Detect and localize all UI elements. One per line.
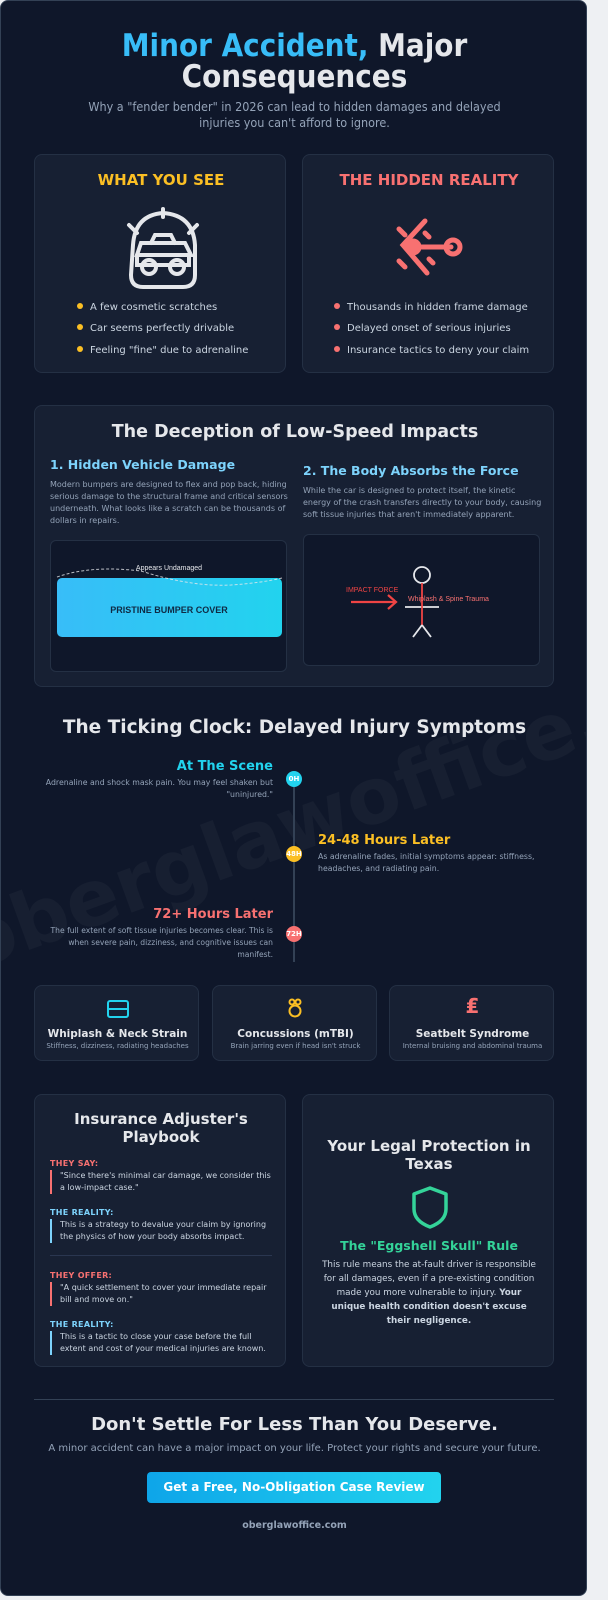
text: eggshell: This rule means the at-fault driver is responsible for all damages, even if a pre-existing condition made you more vulnerable to injury. Your unique health condition doesn't excuse their negligence. (322, 1260, 536, 1326)
title: Minor Accident, Major (122, 28, 467, 64)
dot: 72H (286, 926, 302, 942)
item: 24-48 hours: As adrenaline fades, initial symptoms appear: stiffness, headaches, and radiating pain. (318, 852, 535, 873)
card: whiplash: Stiffness, dizziness, radiating headaches (46, 1042, 189, 1050)
item: reality 2: This is a tactic to close your case before the full extent and cost of your medical injuries are known. (60, 1332, 266, 1353)
panel: what you see (34, 154, 286, 373)
block: body absorbs force: While the car is designed to protect itself, the kinetic energy of the crash transfers directly to your body, causing soft tissue injuries that aren't immediately apparent. (303, 486, 541, 519)
card: whiplash (34, 985, 199, 1061)
icon: seatbelt: ₤ (466, 994, 479, 1018)
heading: ticking clock: The Ticking Clock: Delayed Injury Symptoms (63, 717, 526, 738)
dot: 0H (286, 771, 302, 787)
panel: what you see: Car seems perfectly drivable (90, 323, 234, 334)
icon: car (126, 207, 200, 289)
item: reality 2 (50, 1320, 266, 1355)
card: seatbelt: Internal bruising and abdominal trauma (403, 1042, 542, 1050)
item: 72+ hours: 72+ Hours Later (153, 907, 273, 922)
dot: 72H: 72H (286, 930, 302, 938)
item: they say: "Since there's minimal car damage, we consider this a low-impact case." (60, 1171, 271, 1192)
heading: deception: The Deception of Low-Speed Impacts (112, 422, 478, 442)
block: hidden vehicle damage: 1. Hidden Vehicle Damage (50, 457, 235, 472)
item: at the scene: Adrenaline and shock mask pain. You may feel shaken but "uninjured." (46, 778, 273, 799)
item: reality 1: This is a strategy to devalue your claim by ignoring the physics of how your body absorbs impact. (60, 1220, 266, 1241)
item: they say: THEY SAY: (50, 1159, 98, 1168)
heading: legal protection: Texas (405, 1155, 453, 1173)
button: Get a Free, No-Obligation Case Review (163, 1480, 425, 1494)
item: 72+ hours (50, 907, 273, 959)
panel: legal protection (302, 1094, 554, 1367)
icon: shield (412, 1186, 448, 1229)
heading: legal protection (327, 1137, 531, 1173)
heading: legal protection: Your Legal Protection in (327, 1137, 531, 1155)
subheading: eggshell: The "Eggshell Skull" Rule (340, 1238, 518, 1253)
panel: what you see: Feeling "fine" due to adrenaline (90, 345, 248, 356)
item: they offer: THEY OFFER: (50, 1271, 112, 1280)
diagram: bumper: PRISTINE BUMPER COVER (110, 605, 228, 615)
cta heading: Don't Settle For Less Than You Deserve. (91, 1414, 498, 1435)
item: at the scene: At The Scene (177, 759, 273, 774)
item: reality 1 (50, 1208, 266, 1243)
timeline (46, 759, 535, 962)
cta text: A minor accident can have a major impact on your life. Protect your rights and secure your future. (48, 1443, 541, 1454)
card: concussions (212, 985, 377, 1061)
item: at the scene (46, 759, 273, 799)
item: they offer: "A quick settlement to cover your immediate repair bill and move on." (60, 1283, 267, 1304)
item: 24-48 hours: 24-48 Hours Later (318, 833, 450, 848)
card: concussions: Concussions (mTBI) (237, 1028, 354, 1040)
item: they say (50, 1159, 271, 1194)
item: they offer (50, 1271, 267, 1306)
item: reality 2: THE REALITY: (50, 1320, 114, 1329)
dot: 48H: 48H (286, 850, 302, 858)
card: whiplash: Whiplash & Neck Strain (48, 1028, 187, 1040)
diagram: stick figure (303, 534, 540, 666)
heading: playbook (74, 1110, 248, 1146)
heading: playbook: Insurance Adjuster's (74, 1110, 248, 1128)
card: concussions: Brain jarring even if head isn't struck (231, 1042, 360, 1050)
list: hidden reality (334, 302, 529, 356)
block: hidden vehicle damage: Modern bumpers are designed to flex and pop back, hiding serious damage to the structural frame and critical sensors underneath. What looks like a scratch can be thousands of dollars in repairs. (50, 480, 288, 525)
block: body absorbs force (303, 463, 541, 519)
dot: 48H (286, 846, 302, 862)
item: 24-48 hours (318, 833, 535, 873)
item: reality 1: THE REALITY: (50, 1208, 114, 1217)
panel: insurance playbook (34, 1094, 286, 1367)
card: seatbelt (389, 985, 554, 1061)
block: body absorbs force: 2. The Body Absorbs the Force (303, 463, 519, 478)
heading: hidden reality: THE HIDDEN REALITY (340, 171, 518, 189)
title (122, 28, 468, 95)
panel: hidden reality: Delayed onset of serious injuries (347, 323, 511, 334)
block: hidden vehicle damage (50, 457, 288, 525)
heading: playbook: Playbook (123, 1128, 199, 1146)
item: 72+ hours: The full extent of soft tissue injuries becomes clear. This is when severe pain, dizziness, and cognitive issues can manifest. (51, 926, 273, 959)
button (147, 1472, 441, 1503)
panel: deception (34, 405, 554, 687)
diagram: stick figure: Whiplash & Spine Trauma (408, 596, 489, 603)
list: what you see (77, 302, 248, 356)
diagram: bumper (50, 540, 287, 672)
panel: what you see: A few cosmetic scratches (90, 302, 217, 313)
subtitle: Why a "fender bender" in 2026 can lead to hidden damages and delayed injuries you can't afford to ignore. (88, 99, 501, 130)
title: Consequences (182, 59, 407, 95)
icon: concussion (288, 998, 302, 1018)
panel: hidden reality (302, 154, 554, 373)
heading: what you see: WHAT YOU SEE (98, 171, 224, 189)
diagram: bumper: Appears Undamaged (136, 565, 202, 572)
diagram: stick figure: IMPACT FORCE (346, 587, 399, 594)
footer: oberglawoffice.com (242, 1520, 347, 1531)
panel: hidden reality: Thousands in hidden frame damage (347, 302, 528, 313)
panel: hidden reality: Insurance tactics to deny your claim (347, 345, 529, 356)
dot: 0H: 0H (289, 775, 299, 783)
icon: impact (396, 218, 462, 276)
icon: whiplash (107, 1000, 129, 1018)
card: seatbelt: Seatbelt Syndrome (416, 1028, 529, 1040)
